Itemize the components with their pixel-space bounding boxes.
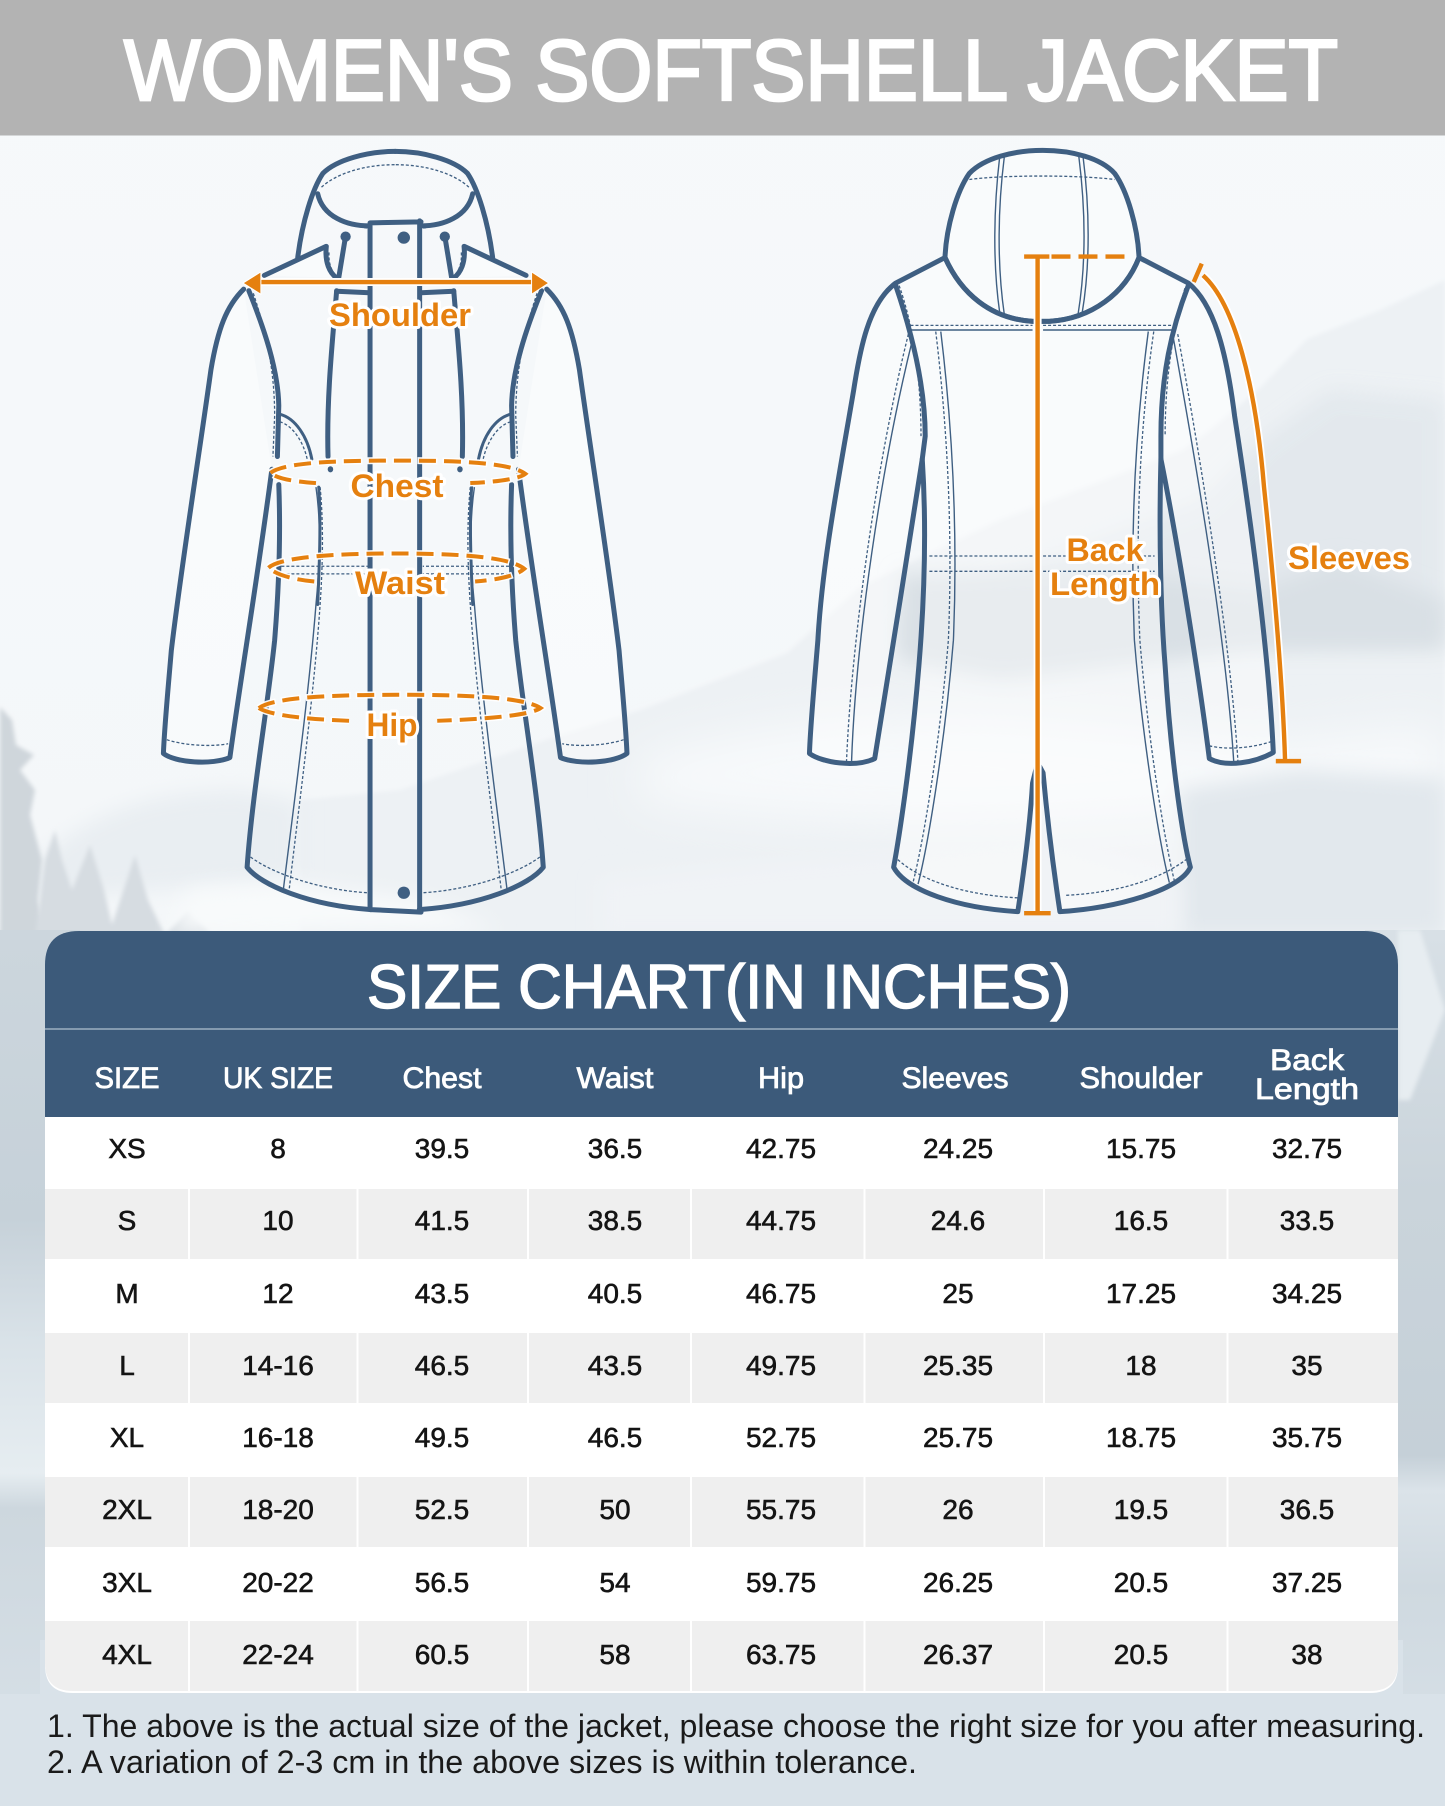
footnotes <box>47 1708 1425 1780</box>
row L: 18 <box>1125 1350 1157 1381</box>
chart heading: SIZE CHART(IN INCHES) <box>367 953 1071 1022</box>
row L: L <box>119 1350 135 1381</box>
row XL: 35.75 <box>1272 1422 1342 1453</box>
row 3XL: 26.25 <box>923 1567 993 1598</box>
row 4XL: 58 <box>599 1639 631 1670</box>
row M: 43.5 <box>415 1278 469 1309</box>
row M: 34.25 <box>1272 1278 1342 1309</box>
row L: 35 <box>1291 1350 1323 1381</box>
label: Back Length: Length <box>1050 566 1160 602</box>
row XS: 15.75 <box>1106 1133 1176 1164</box>
hood <box>945 150 1139 321</box>
table column headers: SIZE <box>94 1062 160 1095</box>
label: Sleeves: Sleeves <box>1288 540 1410 576</box>
measure: chest loop <box>271 461 525 483</box>
row 2XL: 26 <box>942 1494 974 1525</box>
row 2XL: 18-20 <box>242 1494 314 1525</box>
snowfield <box>170 885 500 932</box>
row 3XL: 54 <box>599 1567 631 1598</box>
table column headers: Back <box>1270 1044 1345 1077</box>
row S: 24.6 <box>931 1205 985 1236</box>
diagram: jacket back view <box>809 150 1273 912</box>
fog hill behind trees <box>40 790 300 900</box>
row S <box>118 1205 1334 1236</box>
chart header band <box>45 931 1398 1117</box>
footnotes: 2. A variation of 2-3 cm in the above sizes is within tolerance. <box>47 1744 917 1780</box>
table column headers: UK SIZE <box>223 1062 333 1095</box>
row 4XL: 4XL <box>102 1639 152 1670</box>
zip placket <box>370 221 421 912</box>
row 4XL: 20.5 <box>1114 1639 1168 1670</box>
row 2XL: 19.5 <box>1114 1494 1168 1525</box>
side strips beside the chart <box>0 930 80 1806</box>
row S: 16.5 <box>1114 1205 1168 1236</box>
row M: 17.25 <box>1106 1278 1176 1309</box>
row XL: 52.75 <box>746 1422 816 1453</box>
label: Waist: Waist <box>355 565 445 601</box>
row M: 12 <box>262 1278 294 1309</box>
panel: size chart <box>45 931 1398 1693</box>
row 3XL: 3XL <box>102 1567 152 1598</box>
row S: 33.5 <box>1280 1205 1334 1236</box>
diagram: jacket front view <box>163 151 627 912</box>
row 4XL: 22-24 <box>242 1639 314 1670</box>
row 3XL: 56.5 <box>415 1567 469 1598</box>
row XS: 42.75 <box>746 1133 816 1164</box>
row XS: 8 <box>270 1133 286 1164</box>
label: Shoulder: Shoulder <box>329 297 471 333</box>
row XL: XL <box>110 1422 144 1453</box>
row S: 44.75 <box>746 1205 816 1236</box>
label: Chest: Chest <box>350 468 444 504</box>
row L: 14-16 <box>242 1350 314 1381</box>
row M: 46.75 <box>746 1278 816 1309</box>
row S: 38.5 <box>588 1205 642 1236</box>
title: WOMEN'S SOFTSHELL JACKET <box>124 23 1338 119</box>
table column headers: Hip <box>758 1062 804 1095</box>
table column headers: Waist <box>576 1062 654 1095</box>
row XL: 18.75 <box>1106 1422 1176 1453</box>
row 3XL: 37.25 <box>1272 1567 1342 1598</box>
footnotes: 1. The above is the actual size of the jacket, please choose the right size for you after measuring. <box>47 1708 1425 1744</box>
row 2XL: 50 <box>599 1494 631 1525</box>
row M: 40.5 <box>588 1278 642 1309</box>
table column headers <box>94 1044 1359 1106</box>
row XS: XS <box>108 1133 146 1164</box>
row 3XL: 20-22 <box>242 1567 314 1598</box>
row 3XL: 59.75 <box>746 1567 816 1598</box>
row L: 46.5 <box>415 1350 469 1381</box>
row S: S <box>118 1205 136 1236</box>
label: Back Length: Back <box>1066 532 1144 568</box>
trees left <box>0 707 46 940</box>
row XS: 24.25 <box>923 1133 993 1164</box>
row M: 25 <box>942 1278 974 1309</box>
label: Back Length <box>1050 532 1160 602</box>
table column headers: Sleeves <box>902 1062 1008 1095</box>
row 4XL: 26.37 <box>923 1639 993 1670</box>
row XL: 16-18 <box>242 1422 314 1453</box>
measure: waist loop <box>268 553 524 582</box>
row XL <box>110 1422 1342 1453</box>
label: Hip: Hip <box>366 707 418 743</box>
row 4XL: 60.5 <box>415 1639 469 1670</box>
row XS: 39.5 <box>415 1133 469 1164</box>
row XS: 32.75 <box>1272 1133 1342 1164</box>
table rows background <box>45 1117 1398 1693</box>
row 2XL: 52.5 <box>415 1494 469 1525</box>
row 4XL: 63.75 <box>746 1639 816 1670</box>
row S: 10 <box>262 1205 294 1236</box>
row XL: 25.75 <box>923 1422 993 1453</box>
row M: M <box>115 1278 139 1309</box>
row 3XL: 20.5 <box>1114 1567 1168 1598</box>
row 4XL: 38 <box>1291 1639 1323 1670</box>
table column headers: Length <box>1255 1073 1359 1106</box>
row XL: 49.5 <box>415 1422 469 1453</box>
row S: 41.5 <box>415 1205 469 1236</box>
row 2XL <box>102 1494 1334 1525</box>
row 4XL <box>102 1639 1323 1670</box>
row 3XL <box>102 1567 1342 1598</box>
row L: 43.5 <box>588 1350 642 1381</box>
row L: 49.75 <box>746 1350 816 1381</box>
measure: shoulder arrow <box>243 272 549 294</box>
measure: hip loop <box>259 695 541 721</box>
row M <box>115 1278 1342 1309</box>
row 2XL: 55.75 <box>746 1494 816 1525</box>
row XL: 46.5 <box>588 1422 642 1453</box>
measure: sleeve arc <box>1194 264 1301 761</box>
row L <box>119 1350 1323 1381</box>
row 2XL: 36.5 <box>1280 1494 1334 1525</box>
row XS <box>108 1133 1342 1164</box>
table column headers: Shoulder <box>1080 1062 1203 1095</box>
measure: back length line <box>1024 255 1131 913</box>
back body and sleeves <box>809 258 1273 912</box>
row L: 25.35 <box>923 1350 993 1381</box>
row XS: 36.5 <box>588 1133 642 1164</box>
table column headers: Chest <box>402 1062 482 1095</box>
title bar <box>0 0 1445 136</box>
row 2XL: 2XL <box>102 1494 152 1525</box>
